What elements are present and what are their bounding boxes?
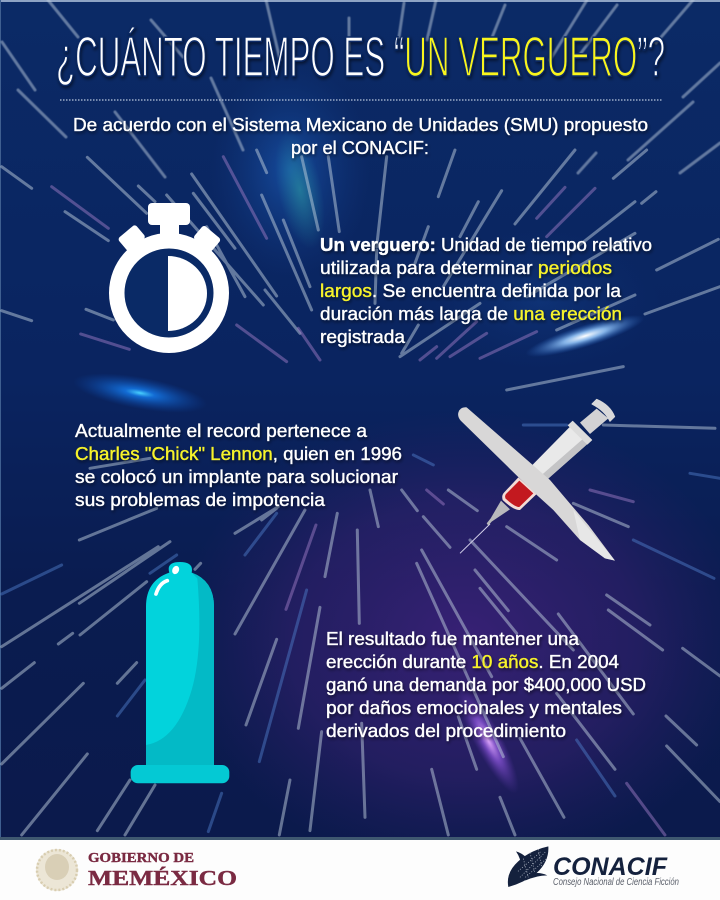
text: record holder: Charles "Chick" Lennon , quien en 1996 — [75, 444, 402, 464]
title divider — [60, 99, 662, 101]
intro text: De acuerdo con el Sistema Mexicano de Unidades (SMU) propuesto — [73, 115, 648, 135]
text: result: ganó una demanda por $400,000 USD — [326, 675, 646, 695]
text: result — [326, 629, 646, 741]
text: result: erección durante 10 años. En 2004 — [326, 652, 619, 672]
text: definition of verguero: utilizada para determinar periodos — [320, 258, 612, 278]
speed lines: upper right — [375, 150, 720, 478]
text: result: por daños emocionales y mentales — [326, 698, 622, 718]
logo: eagle seal — [36, 849, 78, 891]
text: result: derivados del procedimiento — [326, 721, 566, 741]
logo text: gobierno de méxico: GOBIERNO DE — [88, 851, 194, 866]
text: record holder: sus problemas de impotencia — [75, 490, 326, 510]
text: record holder: se colocó un implante para solucionar — [75, 467, 398, 487]
logo: corn — [508, 846, 548, 887]
text: definition of verguero: duración más larga de una erección — [320, 304, 622, 324]
speed lines: lower right — [362, 490, 720, 835]
text: definition of verguero: registrada — [320, 327, 406, 347]
speed lines: upper left — [2, 150, 339, 468]
logo text: gobierno de méxico: MEMÉXICO — [88, 866, 237, 890]
text: definition of verguero: Un verguero: Unidad de tiempo relativo — [320, 235, 652, 255]
icon: condom — [131, 562, 229, 783]
text: record holder: Actualmente el record pertenece a — [75, 421, 368, 441]
logo text: gobierno de méxico — [88, 851, 237, 890]
intro text: por el CONACIF: — [291, 138, 429, 158]
syringe — [460, 399, 615, 553]
icon: crossed syringe and knife — [458, 399, 615, 561]
logo text: conacif: CONACIF — [553, 853, 668, 881]
text: record holder — [75, 421, 402, 510]
intro text — [73, 115, 648, 158]
speed lines: top — [2, 0, 720, 177]
speed lines: lower left — [2, 507, 359, 835]
text: result: El resultado fue mantener una — [326, 629, 580, 649]
knife — [458, 407, 615, 561]
footer panel — [0, 837, 720, 900]
logo text: conacif: Consejo Nacional de Ciencia Ficción — [553, 877, 679, 888]
text: definition of verguero — [320, 235, 652, 347]
text: definition of verguero: largos. Se encuentra definida por la — [320, 281, 622, 301]
icon: stopwatch — [117, 203, 221, 345]
